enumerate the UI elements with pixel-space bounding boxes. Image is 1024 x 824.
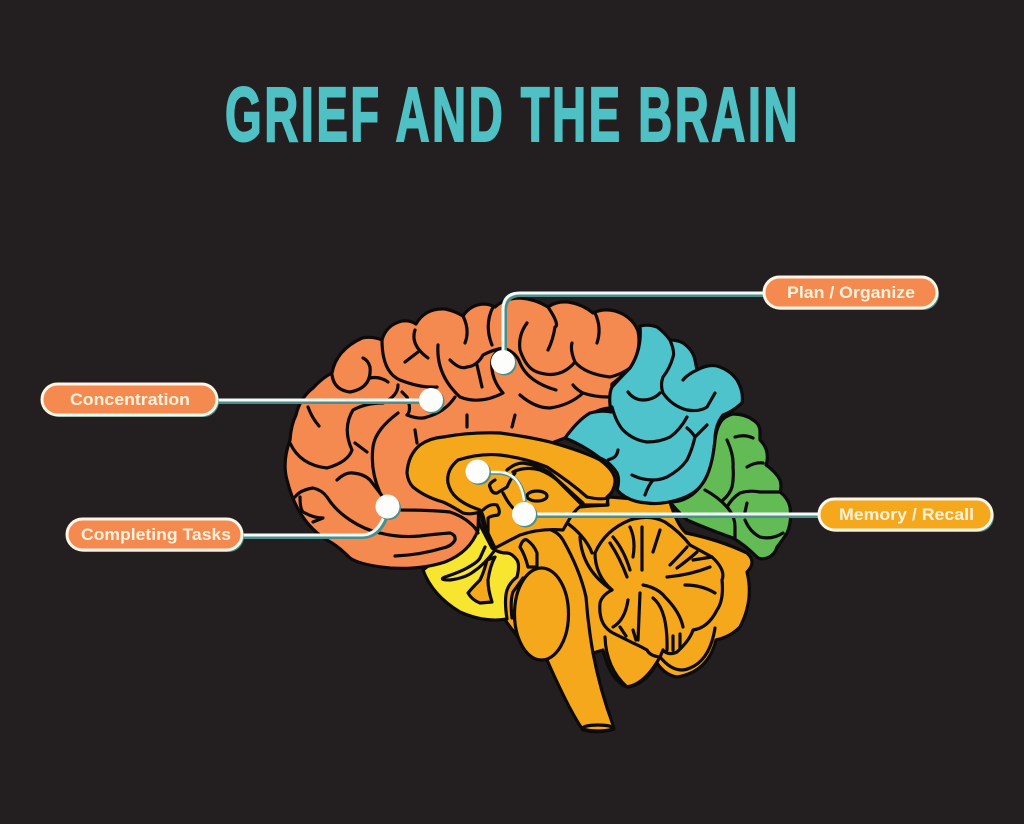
label: plan and organize — [764, 277, 939, 310]
label: memory and recall — [819, 499, 994, 532]
connector: plan and organize — [503, 293, 763, 362]
brain region: frontal and parietal cortex — [285, 298, 639, 568]
optic region lines — [511, 578, 523, 618]
pituitary — [468, 557, 495, 603]
blue folds — [662, 340, 715, 411]
brain region: yellow — [423, 525, 518, 620]
label: memory and recall: Memory / Recall — [839, 505, 974, 524]
brain region: green — [670, 414, 791, 559]
brain region: lower orange brainstem and cerebellum — [480, 497, 752, 732]
marker: concentration — [419, 388, 444, 414]
label: completing tasks: Completing Tasks — [81, 525, 231, 544]
midbrain lines — [537, 527, 593, 653]
brain region: blue — [565, 325, 742, 504]
label: concentration — [42, 384, 219, 417]
brainstem end cap — [583, 725, 613, 731]
connector: completing tasks — [243, 507, 389, 537]
pons oval — [514, 568, 568, 660]
inner callosum curve — [448, 455, 608, 548]
thalamus ellipse — [527, 491, 547, 501]
label: plan and organize: Plan / Organize — [787, 283, 915, 302]
fornix arcs — [507, 463, 583, 505]
connector: memory and recall — [524, 514, 818, 516]
third ventricle stalk — [483, 505, 499, 548]
lower cerebellum lobes — [605, 637, 660, 687]
cortex folds — [290, 385, 398, 468]
corpus callosum and thalamus — [407, 433, 615, 618]
connector: concentration — [217, 400, 431, 402]
marker: plan and organize — [491, 350, 516, 376]
marker: limbic upper — [466, 460, 491, 485]
connector: memory branch — [478, 472, 525, 500]
marker: completing tasks — [376, 494, 401, 520]
marker: memory and recall — [512, 502, 538, 528]
brain illustration — [285, 298, 791, 732]
green folds — [723, 436, 763, 500]
label: concentration: Concentration — [70, 390, 190, 409]
label: completing tasks — [67, 519, 244, 552]
cerebellum arbor — [595, 517, 723, 657]
